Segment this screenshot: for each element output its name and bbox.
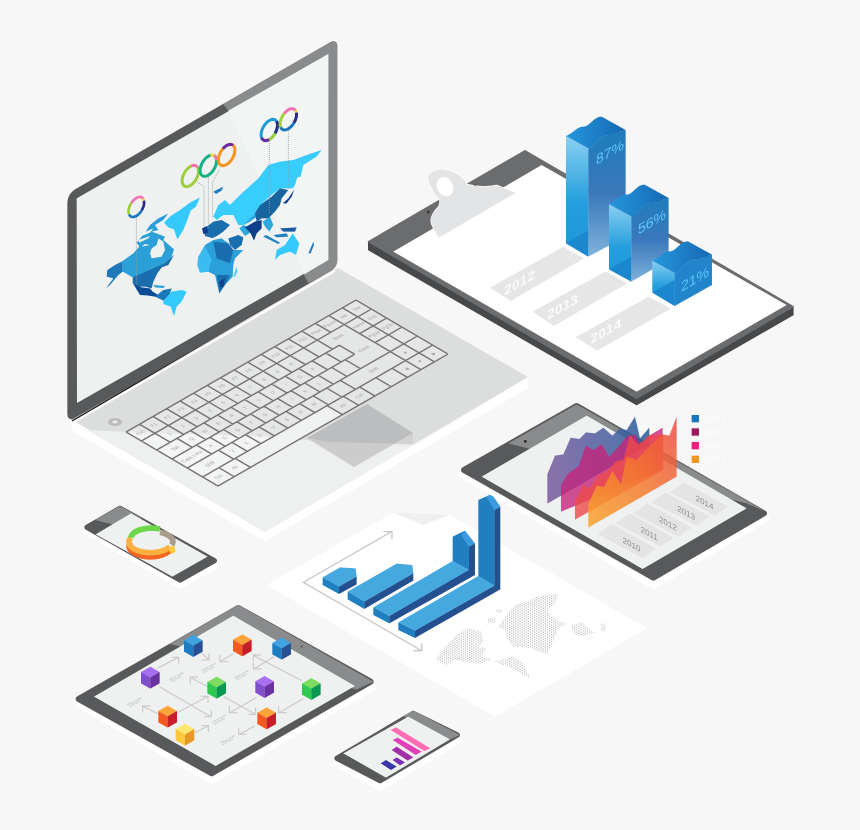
key background [126, 300, 448, 486]
sheet fold [393, 513, 450, 525]
key labels: F8 [244, 368, 255, 374]
cube blue [184, 635, 203, 657]
hinge line [72, 268, 335, 423]
key labels: F1 [149, 422, 160, 428]
key labels: H [275, 405, 284, 410]
key labels: J [289, 397, 297, 402]
3D bar 56% [609, 185, 669, 282]
key labels: N [297, 410, 306, 415]
India [245, 220, 262, 241]
key labels: K [302, 389, 311, 394]
Central America [155, 288, 172, 301]
key labels: F5 [204, 391, 214, 397]
key labels: W [201, 429, 210, 434]
key labels: Tab [170, 445, 182, 452]
year band 2011 [616, 513, 674, 547]
flow caption text: Place name [128, 695, 142, 707]
display [94, 616, 355, 766]
donut 1 [125, 194, 147, 220]
year label 2012 [490, 247, 584, 301]
key labels: O [296, 375, 305, 380]
donut depth [129, 542, 170, 557]
United States [133, 255, 174, 288]
board top [368, 151, 793, 398]
key labels: Ins [339, 313, 350, 320]
year band 2012 [633, 503, 692, 537]
year band 2013 [652, 492, 710, 526]
key labels: 5 [220, 401, 228, 405]
bezel [67, 41, 337, 419]
bar 4 [398, 494, 500, 638]
key labels: E [215, 421, 224, 426]
key labels: C [256, 433, 265, 438]
power button [108, 418, 122, 426]
key labels: F [248, 420, 256, 425]
3D bar 21%: 21% [681, 264, 709, 296]
year band 2013: 2013 [677, 503, 695, 522]
year band 2014 [670, 482, 728, 516]
Arctic gaps [138, 228, 153, 247]
key labels: 7 [247, 385, 255, 390]
key labels: Esc [135, 429, 148, 437]
legend [692, 414, 726, 464]
donut 4 [215, 142, 238, 168]
phone body [337, 713, 457, 781]
area series 2 [561, 428, 663, 512]
year label 2013 [533, 271, 627, 326]
key labels: Shift [204, 460, 218, 468]
area series 1 [547, 417, 649, 504]
West Africa [197, 246, 212, 273]
cube orange [257, 707, 276, 729]
key labels: ▼ [416, 359, 425, 364]
panel: printed sheet with 3D bar chart [267, 494, 647, 717]
key labels: 3 [193, 416, 201, 421]
cube purple [255, 676, 274, 698]
year band 2010 [598, 524, 656, 558]
key labels: F12 [297, 336, 310, 343]
New Zealand [308, 242, 314, 253]
Africa [197, 238, 243, 293]
3D bar 87% [566, 117, 626, 257]
bar 3 [373, 531, 475, 623]
bar 1 [381, 760, 397, 770]
key labels: F9 [258, 360, 268, 366]
cube green [207, 677, 226, 699]
key labels: I [283, 383, 290, 387]
South Africa core [219, 278, 225, 287]
phone gloss [95, 506, 142, 525]
key labels: G [261, 412, 270, 417]
key labels: F6 [217, 383, 228, 389]
3D bar 56%: 56% [638, 206, 666, 238]
Alaska [106, 262, 123, 288]
key labels: 1 [166, 432, 174, 436]
donut 6 [277, 106, 300, 133]
Canada [122, 213, 174, 277]
year label 2014: 2014 [591, 316, 622, 348]
key labels: S [221, 436, 230, 441]
world map: Americas [106, 197, 200, 316]
bezel gloss [223, 41, 337, 283]
tablet shadow [461, 410, 767, 587]
phone body [87, 508, 214, 580]
key labels: PgDn [380, 322, 396, 331]
sheet paper [267, 513, 647, 717]
bar 5 [391, 727, 430, 751]
area series 4 [588, 417, 677, 528]
legend: UNIT 2 [703, 428, 726, 437]
key labels: 6 [234, 393, 242, 398]
flow caption text: text here [214, 716, 225, 726]
Central Asia [243, 205, 260, 225]
phone shadow [85, 512, 217, 586]
key labels: V [270, 425, 279, 430]
flow caption text: text here [223, 737, 233, 746]
Japan [283, 189, 294, 203]
donut taupe [160, 532, 173, 545]
panel: tablet with flow diagram [77, 605, 374, 782]
panel: clipboard with bars [368, 117, 793, 405]
panel: laptop [67, 41, 528, 541]
key labels: F10 [270, 352, 283, 359]
key labels [134, 304, 442, 482]
key labels: F3 [177, 407, 187, 413]
body gloss [170, 605, 373, 689]
Mexico [133, 284, 160, 297]
key labels: 4 [207, 409, 215, 413]
keyboard [126, 300, 448, 486]
flow caption text: text here [171, 674, 182, 683]
Iran [239, 225, 255, 236]
key labels: Ctrl [213, 474, 225, 481]
phone shadow [335, 717, 460, 789]
display glare [228, 54, 328, 274]
key labels: T [242, 406, 250, 411]
key labels: 8 [261, 378, 269, 382]
bar 2 [348, 564, 413, 609]
key labels: D [234, 428, 243, 433]
key labels: M [310, 402, 319, 407]
year band 2011: 2011 [641, 524, 658, 543]
year band 2010: 2010 [623, 535, 641, 554]
South-east Asia [263, 217, 273, 232]
China [255, 188, 288, 222]
flow caption text: text here [130, 699, 140, 708]
key labels: Y [256, 398, 264, 403]
legend: UNIT 4 [703, 455, 726, 464]
donut orange [129, 538, 170, 553]
Australia [275, 233, 299, 260]
laptop screen [67, 41, 337, 419]
display [343, 717, 450, 778]
bar 3 [392, 747, 413, 761]
Iceland [213, 187, 223, 194]
tablet shadow [77, 611, 374, 782]
body gloss [508, 404, 766, 512]
key labels: 0 [288, 362, 296, 367]
key glare [126, 384, 302, 486]
key labels: Del [352, 305, 363, 312]
key labels: Caps Lock [180, 450, 205, 464]
key labels: U [269, 390, 278, 395]
3D donut [129, 528, 173, 557]
area series 3 [575, 434, 663, 520]
year band 2012: 2012 [659, 514, 677, 533]
panel: phone with bar chart [335, 711, 460, 789]
Caribbean [153, 285, 165, 288]
dotted world map [436, 594, 606, 678]
cube green [302, 678, 321, 700]
year label 2012: 2012 [504, 267, 535, 299]
key labels: Q [188, 437, 196, 442]
Madagascar [233, 267, 237, 277]
paper [393, 165, 787, 392]
flow caption text: text here [236, 672, 247, 681]
flow caption text: Place name [221, 733, 235, 745]
Southern Africa [217, 275, 230, 293]
cube yellow [176, 724, 194, 746]
key grid [126, 300, 448, 486]
key labels: End [367, 314, 379, 322]
key labels: Home [351, 321, 368, 330]
donut 2 [179, 163, 202, 189]
Hudson Bay [150, 238, 165, 258]
donut yellow block [168, 546, 176, 554]
Central Africa [213, 242, 233, 263]
flow caption text: Place name [202, 661, 216, 673]
key labels: R [228, 413, 237, 419]
key labels: F2 [163, 414, 173, 420]
Middle East [228, 235, 243, 250]
key labels: F7 [231, 376, 241, 382]
key labels: 9 [274, 370, 282, 374]
bar 4 [393, 738, 422, 755]
key labels: Back [332, 333, 347, 341]
base reflection [76, 378, 528, 532]
year band 2014: 2014 [696, 493, 714, 512]
key labels: PgUp [367, 330, 383, 339]
key labels: X [243, 441, 252, 446]
key labels: A [207, 443, 216, 448]
Britain [202, 226, 208, 234]
key labels: Ctrl [354, 393, 366, 400]
cube blue [272, 638, 291, 660]
camera [524, 440, 527, 443]
flow caption text [128, 661, 249, 748]
key labels: F4 [190, 399, 200, 405]
legend: UNIT 3 [703, 441, 726, 450]
flow caption text: Place name [212, 713, 226, 724]
spacebar [235, 406, 342, 467]
3D bar 21% [652, 241, 712, 306]
trackpad [307, 404, 413, 467]
cube orange [158, 706, 177, 728]
display [77, 54, 328, 403]
flow caption text: Place name [169, 670, 183, 682]
key labels: Pause [322, 319, 339, 329]
donut 3 [197, 152, 220, 179]
Mediterranean gap [212, 230, 235, 240]
cube orange [233, 634, 252, 656]
key labels: P [310, 367, 318, 372]
legend: UNIT 1 [703, 414, 726, 423]
flow arrows [143, 652, 303, 734]
Greenland [164, 197, 200, 239]
key labels: B [284, 417, 292, 422]
flow caption text: Place name [234, 668, 248, 680]
key labels: ◀ [403, 367, 412, 372]
map leader lines [136, 130, 288, 285]
display [96, 513, 208, 577]
key labels: F11 [284, 344, 296, 351]
tablet body [464, 406, 764, 578]
donut 5 [258, 117, 281, 143]
key labels: 2 [180, 424, 187, 429]
key labels: ▲ [401, 350, 410, 355]
clip [427, 169, 517, 238]
phone gloss [403, 711, 460, 739]
Indonesia [263, 227, 297, 244]
laptop base edge [72, 376, 528, 541]
panel: tablet with area chart [461, 404, 767, 587]
key labels: Alt [230, 465, 241, 471]
year label 2014 [576, 297, 671, 351]
key labels: Z [229, 449, 237, 453]
bar 1 [323, 567, 357, 594]
key labels: Alt [338, 403, 349, 409]
flow caption text: text here [204, 664, 214, 674]
tablet body [79, 608, 371, 773]
key labels: Enter [357, 345, 373, 354]
Russia and north Asia [213, 150, 322, 225]
map overlays [125, 106, 300, 285]
key labels: Prtsc [310, 328, 325, 336]
donut green [131, 528, 160, 538]
Europe [203, 220, 230, 238]
display [482, 416, 747, 569]
board edge [368, 242, 793, 405]
world map: Eurasia, Africa and Oceania [197, 150, 322, 293]
chart axes [303, 532, 422, 651]
laptop base top [72, 268, 528, 532]
key labels: Shift [367, 366, 381, 374]
bar 2 [393, 757, 405, 765]
camera [300, 645, 303, 648]
key labels: ▶ [430, 351, 439, 356]
South America [163, 290, 187, 316]
cube purple [141, 667, 160, 689]
year label 2013: 2013 [547, 291, 578, 324]
3D bar 87%: 87% [596, 137, 624, 169]
key labels: L [316, 382, 324, 386]
panel: phone with donut chart [85, 506, 217, 586]
